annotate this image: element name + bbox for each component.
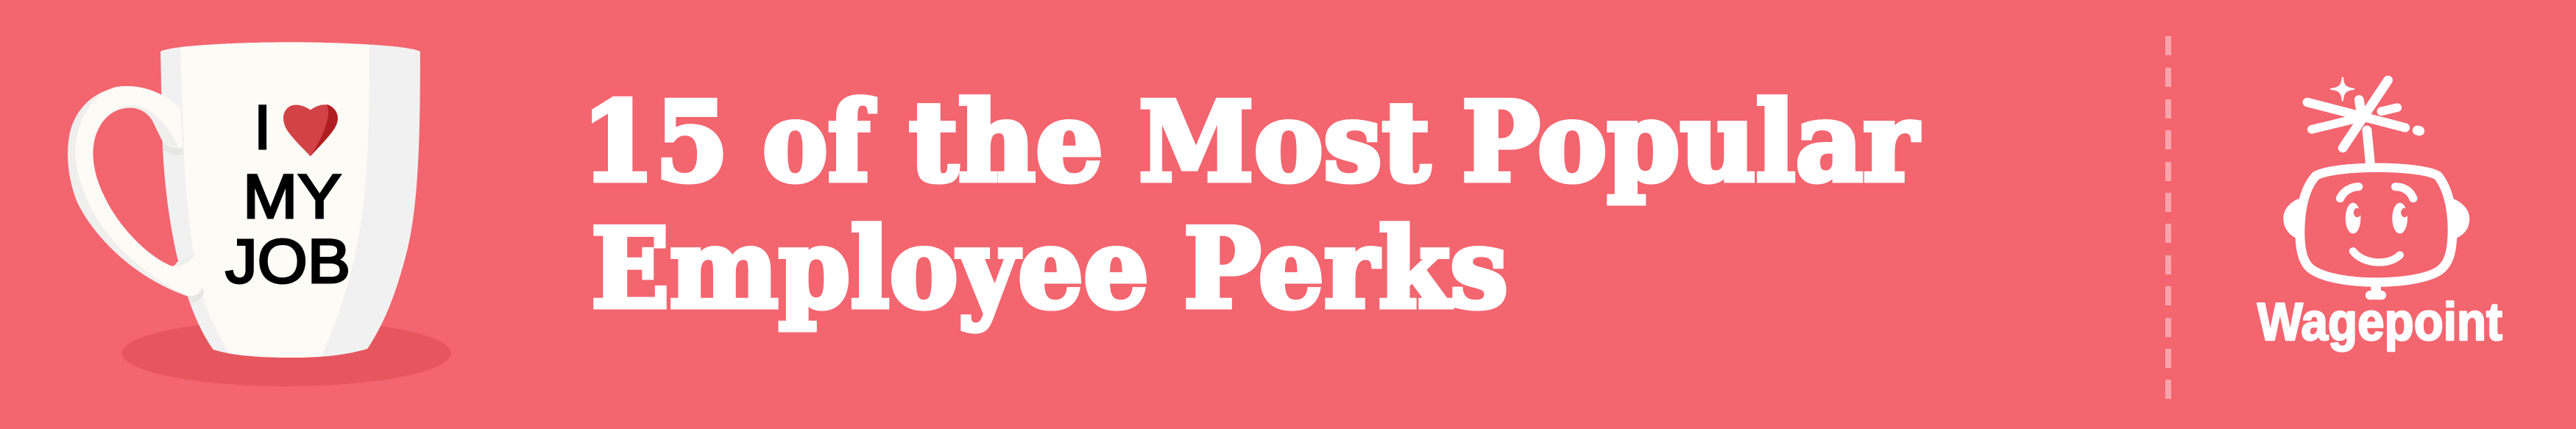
robot face — [2340, 187, 2413, 262]
mug shadow — [122, 320, 451, 386]
robot stand — [2366, 285, 2386, 299]
title: of — [762, 78, 876, 207]
dashed divider — [2165, 36, 2171, 399]
mug body — [160, 42, 420, 358]
title: Perks — [1183, 205, 1508, 333]
title: 15 — [581, 78, 729, 207]
heart icon — [283, 104, 338, 156]
mug handle — [68, 86, 204, 303]
title: Employee — [591, 205, 1149, 333]
mug body and shadow — [122, 42, 451, 386]
title: the — [909, 78, 1103, 207]
spark burst — [2307, 78, 2419, 163]
robot ears — [2283, 199, 2469, 238]
illustration: coffee mug — [68, 42, 451, 386]
mug text: JOB — [225, 227, 350, 296]
mug text: I — [254, 93, 271, 162]
title: Most — [1139, 78, 1430, 207]
logo: Wagepoint robot mascot — [2283, 78, 2469, 299]
mug text — [225, 93, 350, 296]
logo wordmark: Wagepoint — [2257, 293, 2502, 352]
robot head — [2300, 168, 2452, 283]
mug text: MY — [243, 162, 342, 231]
title: Popular — [1462, 78, 1919, 207]
title — [581, 78, 1919, 333]
